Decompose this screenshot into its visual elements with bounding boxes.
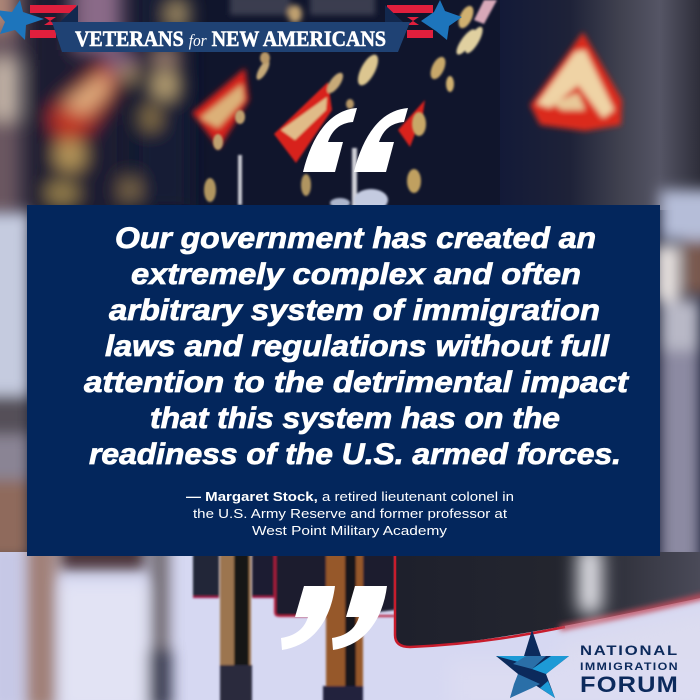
logo text: FORUM [580,672,679,697]
header banner: Veterans for New Americans [0,0,462,52]
attribution: — Margaret Stock, a retired lieutenant colonel in [186,489,514,504]
icon: logo star [496,630,569,698]
attribution: the U.S. Army Reserve and former professor at [193,506,507,521]
banner ribbon [52,22,410,52]
quote text: attention to the detrimental impact [84,366,630,399]
logo text: IMMIGRATION [580,661,679,673]
attribution [186,489,514,538]
icon: left star and stripes [0,0,78,40]
logo text [580,642,679,697]
far left blurred uniforms [0,0,190,220]
quote text: that this system has on the [150,402,560,435]
quote panel [27,205,660,556]
quote text: arbitrary system of immigration [109,294,600,327]
logo: National Immigration Forum [496,630,679,698]
quote text: extremely complex and often [131,258,581,291]
right soldier jacket details [407,0,497,193]
quote text [84,222,630,471]
quote text: laws and regulations without full [105,330,610,363]
side strips [0,190,700,565]
attribution: West Point Military Academy [252,523,448,538]
icon: right star and stripes [385,0,462,40]
logo text: NATIONAL [580,642,679,658]
quote text: readiness of the U.S. armed forces. [89,438,621,471]
closing quotation mark [281,586,387,650]
lower background [0,540,700,700]
banner title: VETERANS for NEW AMERICANS [75,26,386,51]
blurred middle chevrons [192,0,375,148]
quote text: Our government has created an [115,222,596,255]
opening quotation mark [303,108,408,172]
